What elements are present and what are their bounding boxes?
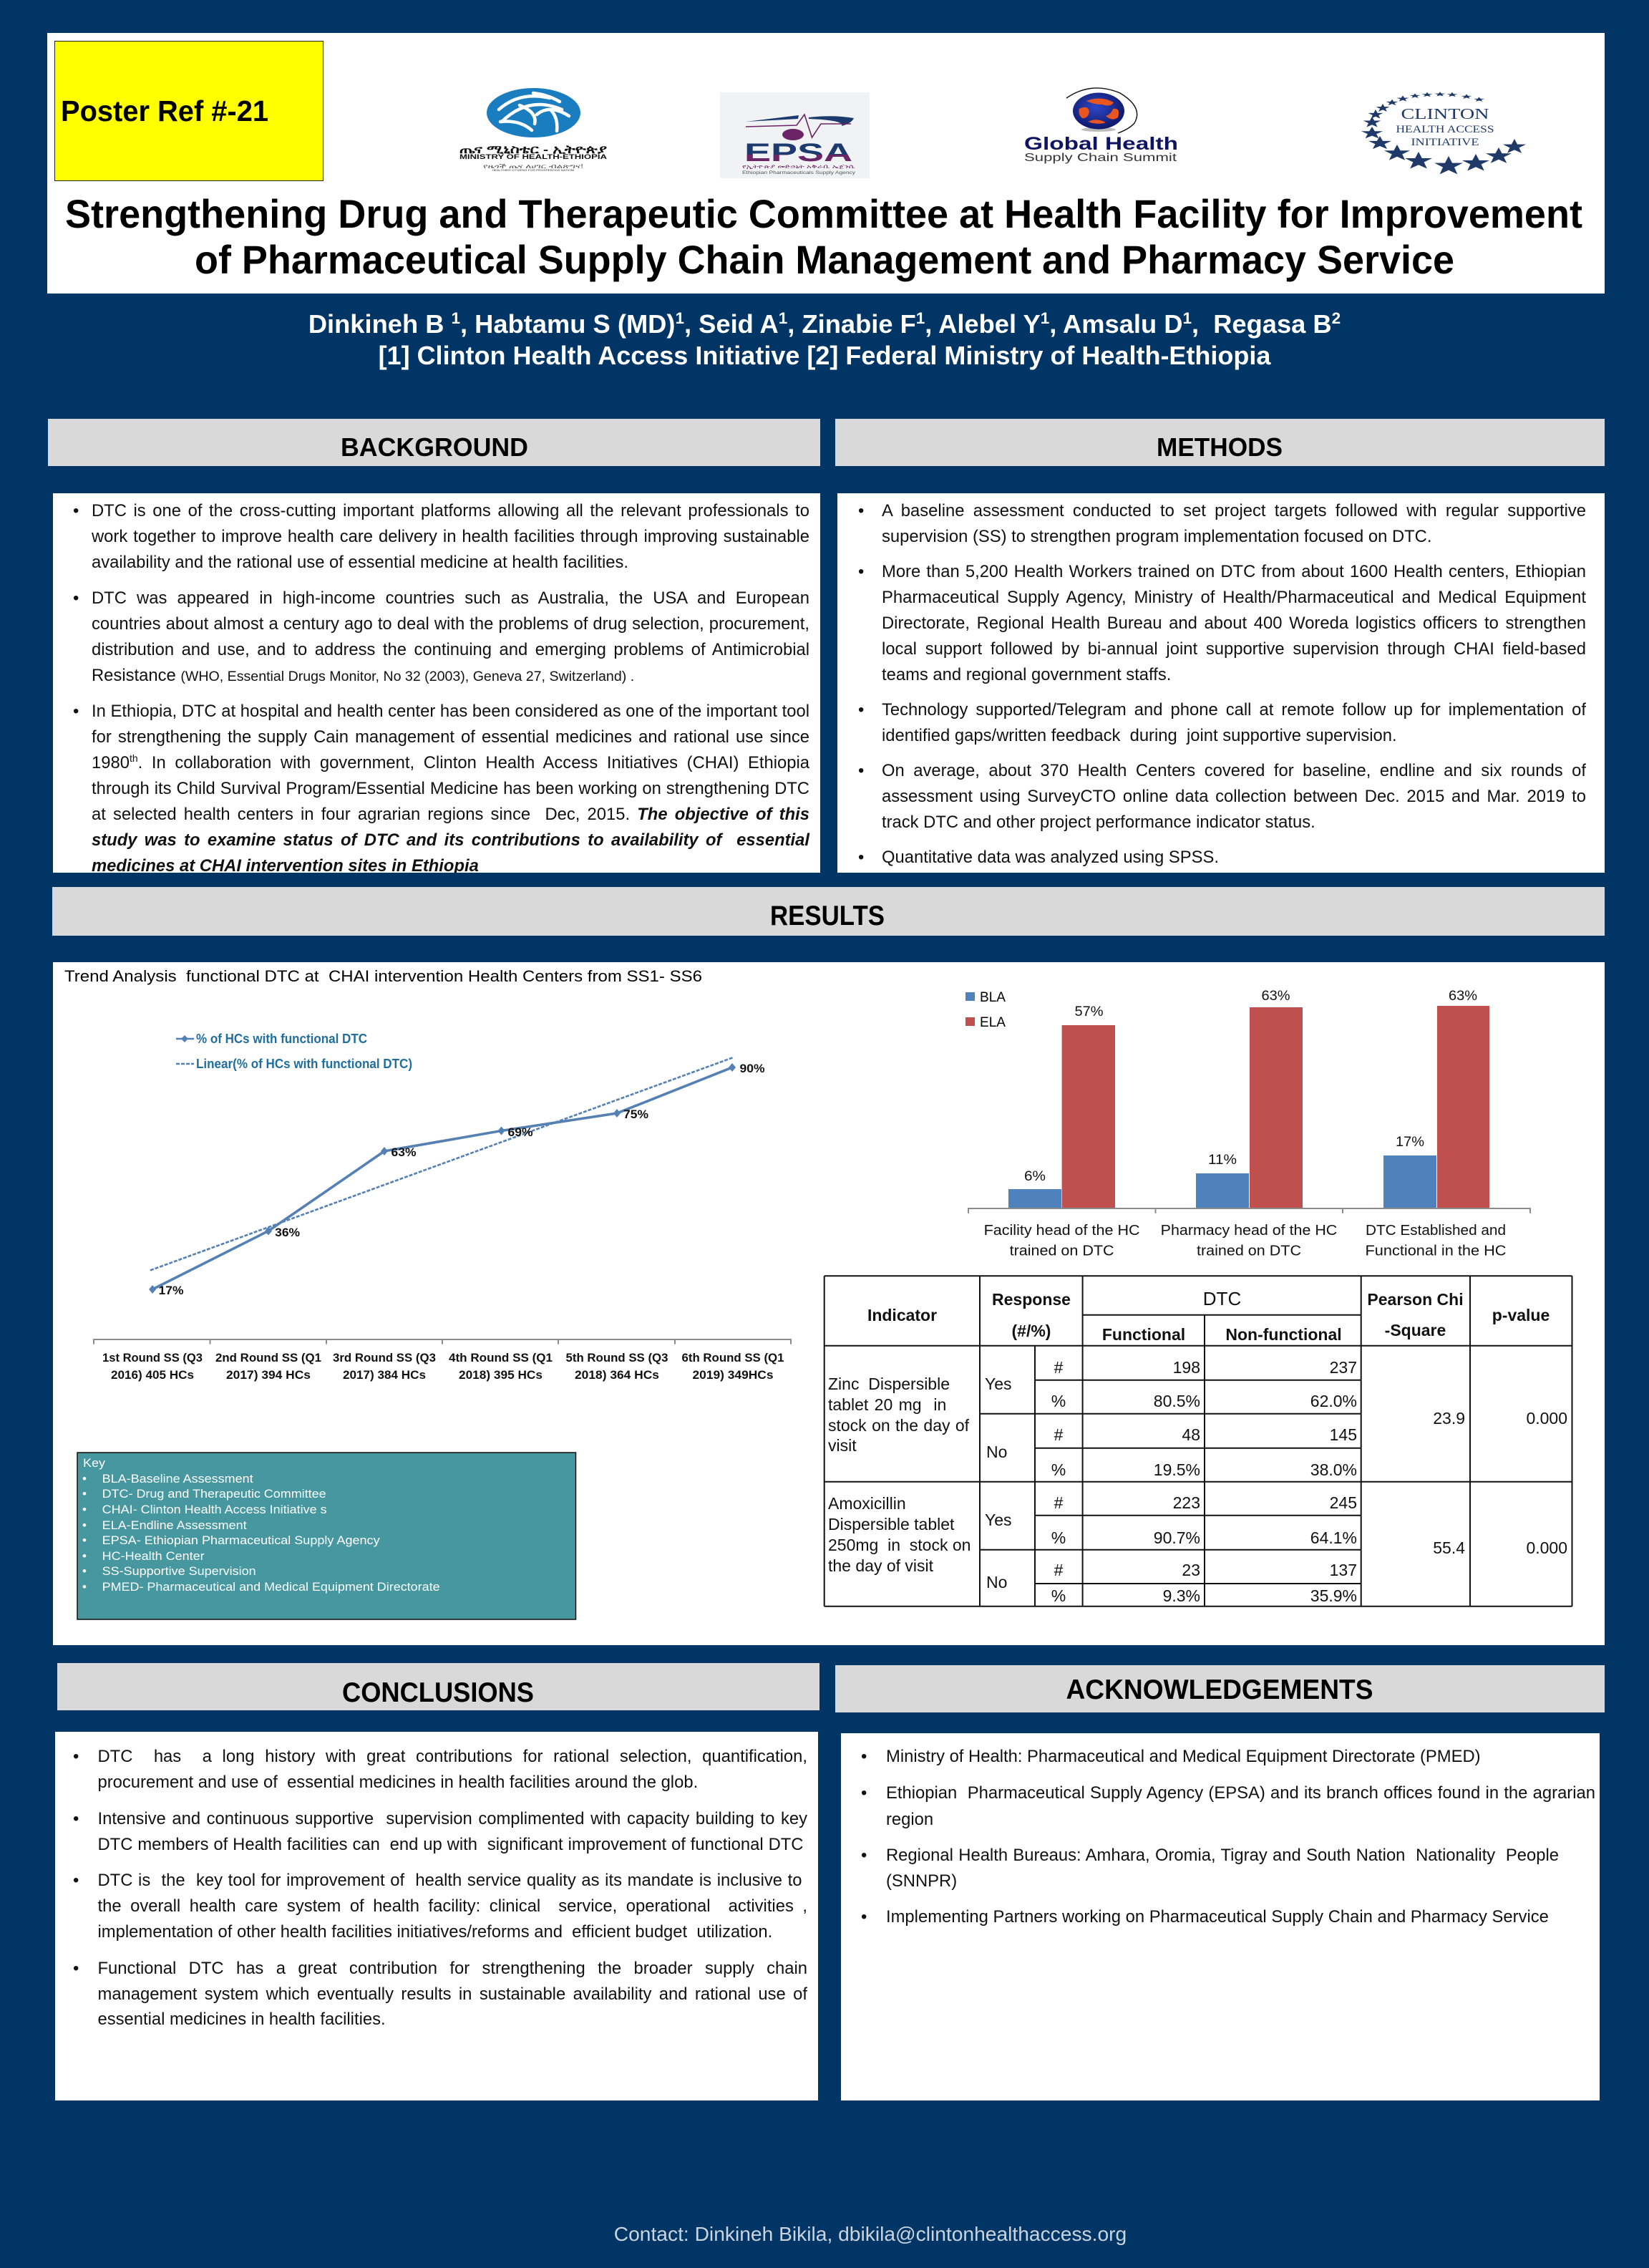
logo: EPSA: EPSA: [744, 139, 852, 167]
bullet: DTC in Ethiopia and objective: study was to examine status of DTC and its contributions to availability of essential: [92, 830, 809, 850]
bullet: survey: On average, about 370 Health Centers covered for baseline, endline and six rounds of: [882, 760, 1586, 780]
bullet: key tool: DTC is the key tool for improvement of health service quality as its mandate is inclusive to: [97, 1871, 802, 1890]
bullet: training: Directorate, Regional Health Bureau and about 400 Woreda logistics officers to strengthen: [882, 614, 1586, 633]
contact line: Contact: Dinkineh Bikila, dbikila@clintonhealthaccess.org: [614, 2222, 1127, 2245]
bullet: supply chain: Functional DTC has a great contribution for strengthening the broader supply chain: [97, 1959, 807, 1978]
row group: zinc: #: [1054, 1425, 1064, 1444]
bullet: history: procurement and use of essential medicines in health facilities around the glob.: [97, 1773, 698, 1792]
key box: ELA-Endline Assessment: [102, 1518, 247, 1532]
data labels: 63%: [391, 1145, 417, 1159]
row group: zinc: stock on the day of: [828, 1416, 970, 1435]
table header: Response: [992, 1290, 1071, 1309]
bullet: key tool: the overall health care system of health facility: clinical service, operational activities ,: [97, 1896, 807, 1916]
category labels: trained on DTC: [1197, 1243, 1301, 1259]
bullet: analysis: Quantitative data was analyzed using SPSS.: [882, 848, 1219, 866]
bullet: baseline assessment: [858, 501, 1586, 546]
bullet: survey: [858, 760, 1586, 832]
legend: Linear(% of HCs with functional DTC): [196, 1057, 412, 1071]
row group: zinc: Zinc Dispersible: [828, 1375, 950, 1393]
bars: [1008, 1189, 1061, 1208]
bullet: DTC history: [73, 588, 809, 685]
table header: Non-functional: [1225, 1325, 1342, 1344]
bullet: supply chain: essential medicines in health facilities.: [97, 2010, 386, 2029]
row group: amoxicillin: 245: [1330, 1493, 1357, 1512]
key box: [77, 1453, 575, 1619]
bullet: DTC history: DTC was appeared in high-income countries such as Australia, the USA and European: [92, 588, 809, 608]
row group: amoxicillin: 0.000: [1526, 1538, 1567, 1557]
logo: EPSA: [720, 92, 870, 178]
x axis: [94, 1339, 791, 1344]
data labels: 17%: [159, 1284, 183, 1297]
data labels: 69%: [508, 1125, 532, 1139]
bullet: DTC in Ethiopia and objective: 1980th. In collaboration with government, Clinton Health Access Initiatives (CHAI) Ethiopia: [92, 752, 809, 772]
key box: •: [82, 1549, 87, 1563]
data labels: [1024, 989, 1477, 1184]
bullet: baseline assessment: supervision (SS) to strengthen program implementation focused on DTC.: [882, 527, 1431, 546]
logo: Ministry of Health Ethiopia: ጤና ሚኒስቴር - ኢትዮጵያ: [459, 144, 607, 156]
table header: Functional: [1102, 1325, 1185, 1344]
logo: EPSA: EPSA: [744, 139, 852, 167]
x axis labels: 6th Round SS (Q1: [681, 1351, 784, 1365]
key box: •: [82, 1533, 87, 1547]
bullet: key tool: •: [73, 1871, 79, 1890]
category labels: Pharmacy head of the HC: [1161, 1223, 1337, 1239]
key box: DTC- Drug and Therapeutic Committee: [102, 1487, 326, 1501]
panel: conclusions text: [55, 1732, 818, 2100]
bullet: DTC platforms: [73, 501, 809, 572]
x axis labels: 2018) 395 HCs: [459, 1368, 543, 1382]
row group: amoxicillin: Yes: [985, 1511, 1012, 1529]
x axis labels: 5th Round SS (Q3: [565, 1351, 668, 1365]
bullet: DTC in Ethiopia and objective: for strengthening the supply Cain management of essential medicines and rational use since: [92, 727, 809, 747]
bullet: survey: •: [858, 760, 864, 780]
bullet: EPSA: •: [861, 1783, 867, 1803]
category labels: DTC Established and: [1366, 1223, 1506, 1239]
bullet: training: More than 5,200 Health Workers trained on DTC from about 1600 Health centers, Ethiopian: [882, 561, 1586, 581]
x axis labels: 2017) 394 HCs: [226, 1368, 311, 1382]
row group: amoxicillin: 35.9%: [1310, 1586, 1357, 1605]
row group: zinc: %: [1051, 1460, 1066, 1479]
category labels: Facility head of the HC: [984, 1223, 1140, 1239]
poster reference box: Poster Ref #-21: [61, 94, 268, 127]
panel: results: [53, 962, 1605, 1645]
row group: zinc: visit: [828, 1436, 857, 1455]
row group: amoxicillin: %: [1051, 1528, 1066, 1547]
bullet: key tool: [73, 1871, 807, 1942]
bullet: DTC in Ethiopia and objective: through its Child Survival Program/Essential Medicine has been working on strengthening DTC: [92, 779, 809, 798]
panel: background text: [53, 493, 820, 873]
key box: •: [82, 1564, 87, 1578]
x axis labels: 2018) 364 HCs: [575, 1368, 659, 1382]
row group: zinc: 19.5%: [1154, 1460, 1200, 1479]
key box: EPSA- Ethiopian Pharmaceutical Supply Agency: [102, 1533, 380, 1547]
bullet: regional bureaus: (SNNPR): [886, 1871, 957, 1891]
logo: Clinton Health Access Initiative: [1361, 92, 1526, 174]
bullet: EPSA: Ethiopian Pharmaceutical Supply Agency (EPSA) and its branch offices found in the agrarian: [886, 1783, 1595, 1803]
bullet: DTC history: Resistance (WHO, Essential Drugs Monitor, No 32 (2003), Geneva 27, Switzerland) .: [92, 666, 634, 685]
row group: zinc: 0.000: [1526, 1409, 1567, 1428]
bullet: analysis: •: [858, 848, 864, 866]
data labels: 63%: [1449, 989, 1477, 1004]
line chart: trend of functional DTC: [94, 1032, 791, 1382]
logo: Global Health Supply Chain Summit: [1024, 88, 1178, 164]
data labels: 57%: [1075, 1004, 1104, 1019]
row group: zinc: 237: [1330, 1358, 1357, 1377]
table header: (#/%): [1012, 1322, 1051, 1340]
bullet: supervision: DTC members of Health facilities can end up with significant improvement of functional DTC: [97, 1835, 803, 1854]
line chart title: Trend Analysis functional DTC at CHAI intervention Health Centers from SS1- SS6: [64, 967, 702, 985]
bullet: training: •: [858, 561, 864, 581]
logo: Ministry of Health Ethiopia: [459, 88, 607, 172]
x axis labels: [102, 1351, 784, 1382]
logo: Ministry of Health Ethiopia: የዜጎች ጤና ለሀገር ብልጽግና!: [483, 163, 583, 170]
bullet: regional bureaus: Regional Health Bureaus: Amhara, Oromia, Tigray and South Nation Nationality People: [886, 1846, 1559, 1865]
x axis labels: 1st Round SS (Q3: [102, 1351, 203, 1365]
x axis labels: 3rd Round SS (Q3: [333, 1351, 436, 1365]
key box: SS-Supportive Supervision: [102, 1564, 256, 1578]
bullet: ministry: Ministry of Health: Pharmaceutical and Medical Equipment Directorate (PMED): [886, 1747, 1481, 1766]
row group: zinc: 62.0%: [1310, 1392, 1357, 1410]
key box: •: [82, 1518, 87, 1532]
bullet: DTC in Ethiopia and objective: •: [73, 702, 79, 721]
x axis labels: 2017) 384 HCs: [343, 1368, 426, 1382]
bullet: DTC platforms: DTC is one of the cross-cutting important platforms allowing all the relevant professionals to: [92, 501, 809, 520]
heading: acknowledgements: [835, 1665, 1605, 1712]
bullet: DTC in Ethiopia and objective: [73, 702, 810, 873]
key box: PMED- Pharmaceutical and Medical Equipment Directorate: [102, 1580, 440, 1594]
row group: amoxicillin: 23: [1182, 1561, 1200, 1579]
data labels: 63%: [1261, 989, 1290, 1004]
row group: amoxicillin: [828, 1493, 1567, 1605]
row group: zinc: #: [1054, 1358, 1064, 1377]
bullet: DTC in Ethiopia and objective: at selected health centers in four agrarian regions since Dec, 2015. The objective of this: [92, 805, 809, 824]
bullet: partners: •: [861, 1907, 867, 1927]
x axis labels: 2nd Round SS (Q1: [215, 1351, 321, 1365]
bullet: technology follow up: Technology supported/Telegram and phone call at remote follow up for implementation of: [882, 700, 1586, 719]
table grid: [824, 1276, 1572, 1606]
bar chart: BLA vs ELA: ELA: [980, 1015, 1006, 1030]
heading: conclusions: [57, 1663, 819, 1710]
row group: zinc: 38.0%: [1310, 1460, 1357, 1479]
data labels: 11%: [1208, 1153, 1237, 1168]
bullet: supervision: Intensive and continuous supportive supervision complimented with capacity building to key: [97, 1809, 807, 1828]
bar chart: BLA vs ELA: [965, 989, 1530, 1259]
poster reference box: [54, 42, 324, 180]
key box: Key: [83, 1456, 106, 1470]
bullet: training: local support followed by bi-annual joint supportive supervision through CHAI field-based: [882, 639, 1586, 659]
row group: amoxicillin: 250mg in stock on: [828, 1536, 971, 1554]
heading: conclusions: CONCLUSIONS: [342, 1677, 534, 1708]
row group: zinc: No: [986, 1443, 1007, 1461]
row group: amoxicillin: 55.4: [1433, 1538, 1465, 1557]
bullet: baseline assessment: •: [858, 501, 864, 520]
key box: •: [82, 1472, 87, 1486]
data labels: 17%: [1396, 1135, 1424, 1150]
authors: Dinkineh B 1, Habtamu S (MD)1, Seid A1, Zinabie F1, Alebel Y1, Amsalu D1, Regasa B2: [308, 309, 1341, 339]
bullet: history: [73, 1747, 807, 1792]
title: Strengthening Drug and Therapeutic Committee at Health Facility for Improvement: [65, 191, 1582, 236]
bullet: training: teams and regional government staffs.: [882, 665, 1171, 684]
row group: zinc: %: [1051, 1392, 1066, 1410]
bullet: DTC platforms: availability and the rational use of essential medicine at health facilities.: [92, 553, 628, 572]
category labels: Functional in the HC: [1366, 1243, 1506, 1259]
bullet: DTC platforms: work together to improve health care delivery in health facilities through improving sustainable: [92, 527, 809, 546]
bullet: regional bureaus: [861, 1846, 1559, 1891]
affiliations: [1] Clinton Health Access Initiative [2] Federal Ministry of Health-Ethiopia: [379, 341, 1270, 370]
logo: Clinton Health Access Initiative: HEALTH ACCESS: [1396, 124, 1494, 135]
bullet: DTC history: distribution and use, and to address the continuing and emerging problems of Antimicrobial: [92, 640, 809, 659]
x axis labels: 4th Round SS (Q1: [449, 1351, 553, 1365]
logo: Ministry of Health Ethiopia: HEALTHIER CITIZENS FOR PROSPEROUS NATION!: [492, 168, 574, 172]
data labels: 75%: [623, 1108, 648, 1121]
row group: amoxicillin: %: [1051, 1586, 1066, 1605]
table header: Pearson Chi: [1367, 1290, 1464, 1309]
row group: amoxicillin: Amoxicillin: [828, 1494, 906, 1513]
x axis labels: 2019) 349HCs: [693, 1368, 773, 1382]
bullet: history: DTC has a long history with great contributions for rational selection, quantification,: [97, 1747, 807, 1766]
bullet: supervision: [73, 1809, 807, 1854]
key box: •: [82, 1487, 87, 1501]
bullet: technology follow up: identified gaps/written feedback during joint supportive supervision.: [882, 726, 1397, 745]
row group: amoxicillin: No: [986, 1573, 1007, 1591]
data labels: 6%: [1024, 1169, 1046, 1184]
bullet: DTC in Ethiopia and objective: In Ethiopia, DTC at hospital and health center has been considered as one of the important tool: [92, 702, 809, 721]
data labels: 90%: [740, 1062, 764, 1075]
bullet: supply chain: management system which eventually results in sustainable availability and rational use of: [97, 1984, 807, 2004]
heading: results: RESULTS: [770, 901, 885, 931]
data labels: 36%: [275, 1226, 300, 1239]
row group: zinc: 80.5%: [1154, 1392, 1200, 1410]
key box: •: [82, 1580, 87, 1594]
bullet: DTC platforms: •: [73, 501, 79, 520]
heading: background: BACKGROUND: [341, 432, 528, 462]
category labels: trained on DTC: [1010, 1243, 1114, 1259]
table header: Indicator: [867, 1306, 937, 1324]
heading: methods: METHODS: [1157, 432, 1283, 462]
bullet: training: [858, 561, 1586, 684]
key box: HC-Health Center: [102, 1549, 205, 1563]
bullet: partners: Implementing Partners working on Pharmaceutical Supply Chain and Pharmacy Service: [886, 1907, 1549, 1927]
bullet: supply chain: •: [73, 1959, 79, 1978]
table header: -Square: [1385, 1321, 1446, 1339]
bullet: DTC history: countries about almost a century ago to deal with the problems of drug selection, procurement,: [92, 614, 809, 634]
x axis labels: 2016) 405 HCs: [111, 1368, 194, 1382]
trendline: [150, 1057, 734, 1270]
row group: amoxicillin: Dispersible tablet: [828, 1515, 955, 1533]
table header: [867, 1288, 1550, 1344]
row group: amoxicillin: 9.3%: [1163, 1586, 1200, 1605]
key box: CHAI- Clinton Health Access Initiative s: [102, 1503, 327, 1516]
row group: amoxicillin: 90.7%: [1154, 1528, 1200, 1547]
bullet: supervision: •: [73, 1809, 79, 1828]
logo: Clinton Health Access Initiative: INITIATIVE: [1411, 137, 1479, 148]
legend: % of HCs with functional DTC: [196, 1032, 367, 1046]
logo: Global Health Supply Chain Summit: Supply Chain Summit: [1024, 152, 1177, 164]
row group: amoxicillin: 223: [1173, 1493, 1200, 1512]
axis: [968, 1208, 1530, 1213]
row group: zinc: 145: [1330, 1425, 1357, 1444]
row group: zinc: tablet 20 mg in: [828, 1395, 946, 1414]
row group: amoxicillin: the day of visit: [828, 1556, 934, 1575]
row group: zinc: 23.9: [1433, 1409, 1465, 1428]
table header: p-value: [1492, 1306, 1550, 1324]
bullet: ministry: •: [861, 1747, 867, 1766]
row group: zinc: 198: [1173, 1358, 1200, 1377]
legend: [965, 992, 975, 1001]
table: DTC status vs stock availability: [824, 1276, 1572, 1606]
row group: zinc: Yes: [985, 1375, 1012, 1393]
panel: methods text: [837, 493, 1605, 873]
heading: results: [52, 887, 1605, 936]
bullet: technology follow up: [858, 700, 1586, 745]
bullet: EPSA: region: [886, 1810, 933, 1829]
logo: Global Health Supply Chain Summit: Global Health: [1024, 134, 1178, 154]
row group: zinc: 48: [1182, 1425, 1200, 1444]
bullet: EPSA: [861, 1783, 1595, 1829]
row group: amoxicillin: 64.1%: [1310, 1528, 1357, 1547]
title: of Pharmaceutical Supply Chain Management and Pharmacy Service: [195, 237, 1454, 282]
title: [65, 191, 1582, 282]
logo: Clinton Health Access Initiative: CLINTON: [1401, 105, 1489, 122]
bullet: survey: track DTC and other project performance indicator status.: [882, 813, 1315, 832]
bullet: technology follow up: •: [858, 700, 864, 719]
data line: [152, 1067, 732, 1289]
bullet: supply chain: [73, 1959, 807, 2029]
bullet: training: Pharmaceutical Supply Agency, Ministry of Health/Pharmaceutical and Medical Equipment: [882, 588, 1586, 607]
heading: methods: [835, 419, 1605, 466]
table header: DTC: [1203, 1288, 1241, 1309]
category labels: [984, 1223, 1506, 1259]
header panel with logos and title: [47, 33, 1605, 294]
bullet: DTC history: •: [73, 588, 79, 608]
logo: EPSA: የኢትዮጵያ መድኃኒት አቅራቢ ኤጀንሲ: [742, 165, 856, 170]
logo: EPSA: Ethiopian Pharmaceuticals Supply Agency: [742, 170, 856, 175]
heading: background: [48, 419, 820, 466]
data labels: [159, 1062, 764, 1297]
bullet: survey: assessment using SurveyCTO online data collection between Dec. 2015 and Mar. 2019 to: [882, 787, 1586, 806]
row group: zinc: [828, 1358, 1567, 1479]
bar chart: BLA vs ELA: BLA: [980, 990, 1006, 1005]
legend: [176, 1032, 412, 1071]
key box: BLA-Baseline Assessment: [102, 1472, 253, 1486]
row group: amoxicillin: #: [1054, 1561, 1064, 1579]
bullet: history: •: [73, 1747, 79, 1766]
heading: acknowledgements: ACKNOWLEDGEMENTS: [1066, 1675, 1373, 1705]
bullet: key tool: implementation of other health facilities initiatives/reforms and efficient budget utilization.: [97, 1922, 772, 1942]
row group: amoxicillin: #: [1054, 1493, 1064, 1512]
panel: acknowledgements text: [841, 1733, 1600, 2100]
key box: •: [82, 1503, 87, 1516]
row group: amoxicillin: 137: [1330, 1561, 1357, 1579]
bullet: regional bureaus: •: [861, 1846, 867, 1865]
logo: Ministry of Health Ethiopia: MINISTRY OF HEALTH-ETHIOPIA: [459, 153, 607, 161]
bullet: baseline assessment: A baseline assessment conducted to set project targets followed with regular supportive: [882, 501, 1586, 520]
